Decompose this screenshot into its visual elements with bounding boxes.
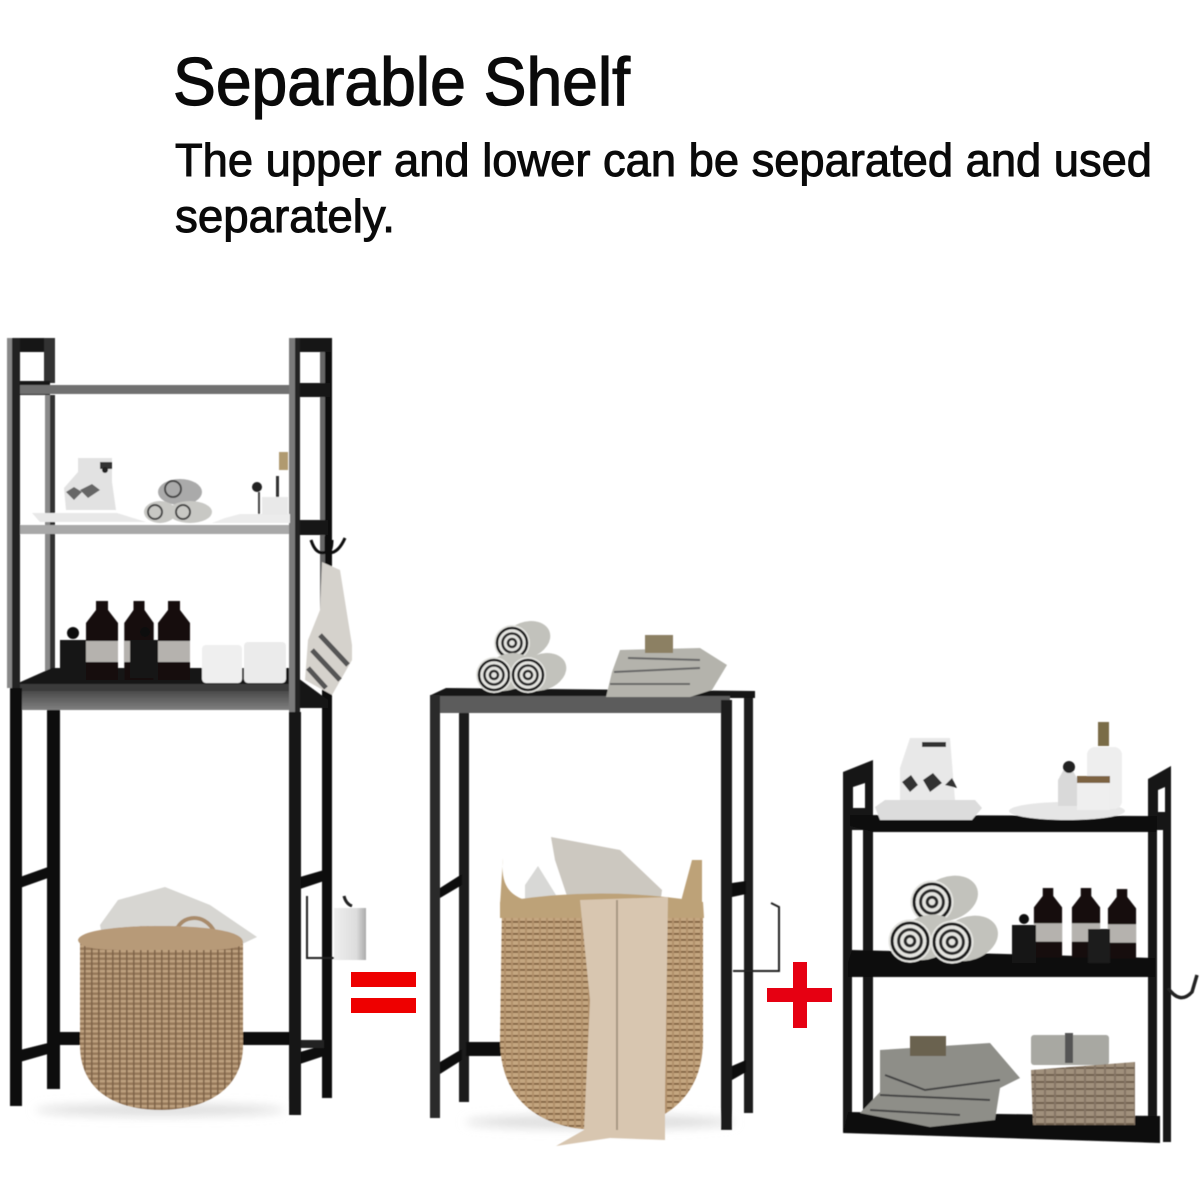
frame: full shelf: [7, 338, 332, 1115]
toilet paper holder: [307, 896, 366, 960]
floor shadow: [35, 1104, 285, 1116]
laundry basket: [78, 887, 257, 1110]
subtitle text: separately.: [175, 190, 395, 242]
title: Separable Shelf: [173, 44, 630, 120]
folded towels: [860, 1036, 1020, 1127]
folded towel stack: [606, 635, 727, 697]
equals sign: [351, 972, 416, 1013]
tall basket with pillow and throw: [500, 837, 704, 1146]
lower toilet frame: [430, 615, 779, 1146]
rolled towels: [888, 868, 1004, 969]
subtitle text: [175, 134, 1152, 242]
frame: wall shelf: [843, 760, 1171, 1143]
toiletries on upper shelf: [32, 452, 290, 523]
rolled towels on top: [476, 615, 572, 697]
frame: lower: [430, 688, 755, 1130]
side hook: [1168, 975, 1197, 998]
bottles: [1012, 888, 1136, 963]
bottles on middle shelf: [60, 601, 190, 680]
toiletries: [875, 722, 1125, 820]
paper rolls: [202, 642, 286, 683]
full over-toilet shelf: [7, 338, 366, 1116]
small basket with towels: [1031, 1033, 1135, 1125]
upper wall shelf: [843, 722, 1197, 1143]
hook and hanging towel: [305, 536, 352, 695]
plus sign: [767, 962, 832, 1028]
floor shadow: [465, 1115, 735, 1129]
towel hook arm: [733, 903, 779, 971]
subtitle text: The upper and lower can be separated and used: [175, 134, 1152, 186]
